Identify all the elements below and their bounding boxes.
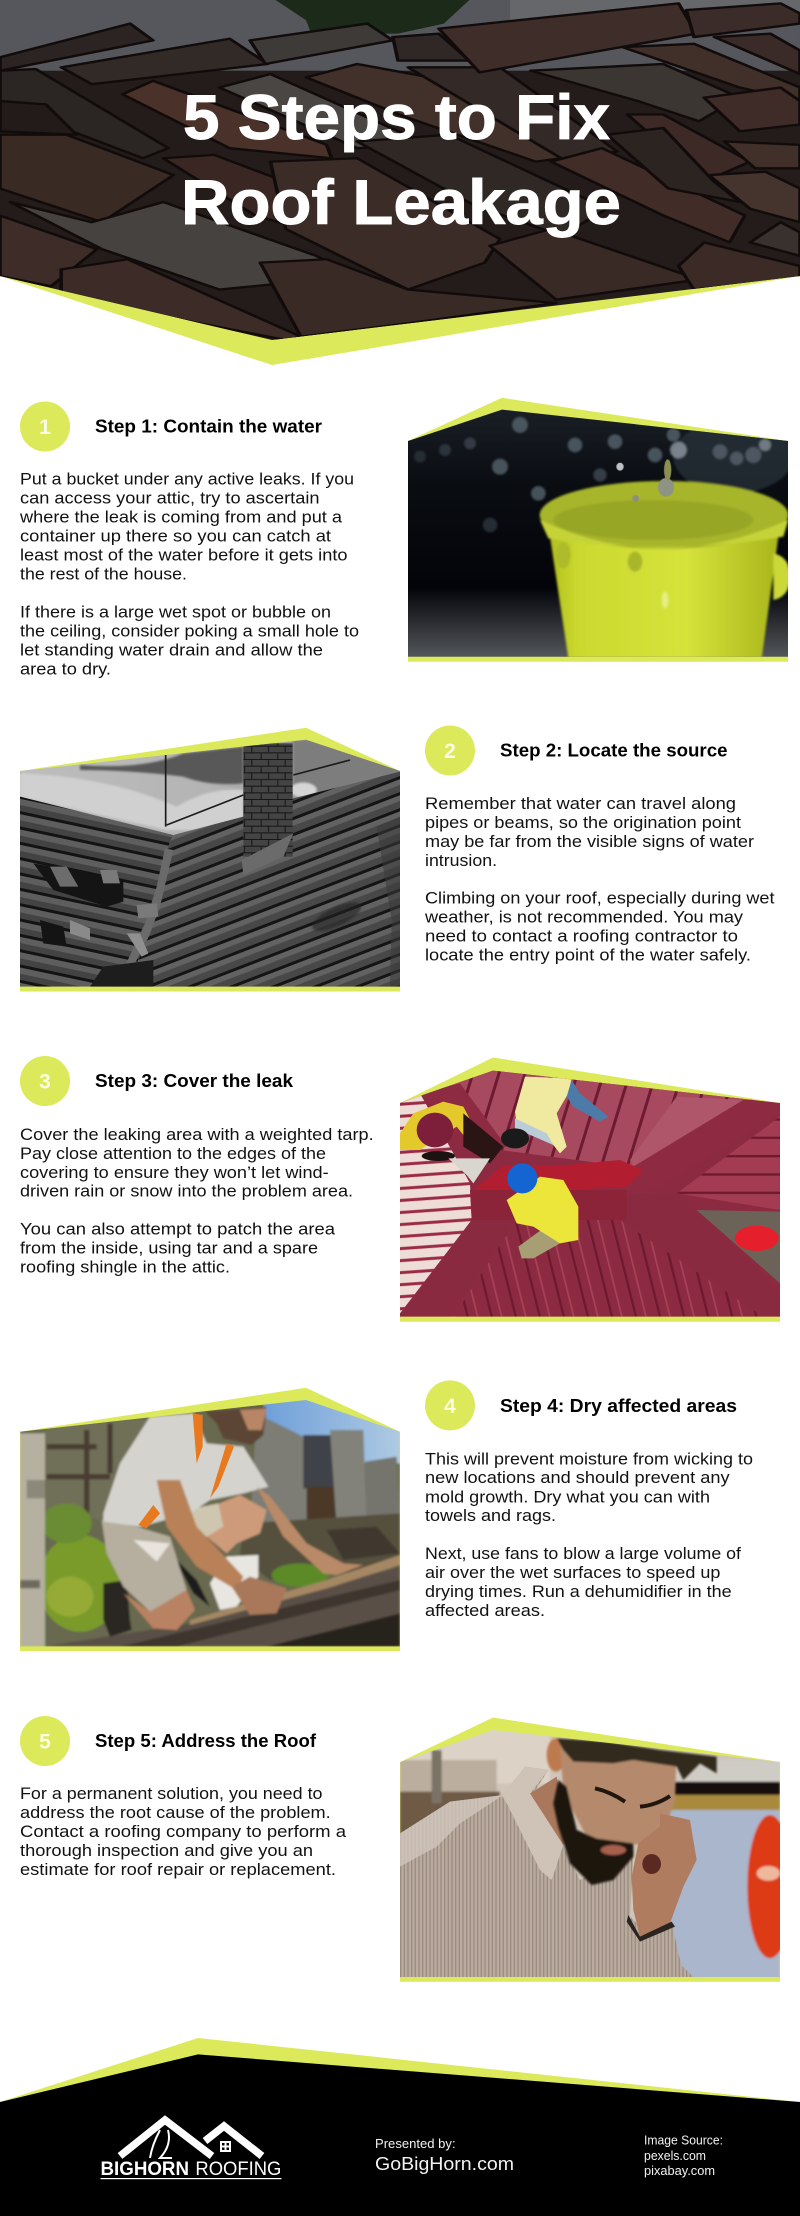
badge 3: 3 (39, 1070, 51, 1094)
heading step 2: Step 2: Locate the source (500, 741, 728, 761)
body step 5: address the root cause of the problem. (20, 1804, 331, 1822)
badge 4 (425, 1380, 475, 1430)
photo: workers on red roof (400, 1058, 780, 1322)
badge 3 (20, 1056, 70, 1106)
body step 1: where the leak is coming from and put a (19, 509, 343, 527)
body step 4: affected areas. (425, 1602, 545, 1620)
left pink panel (400, 1093, 472, 1313)
body step 4: This will prevent moisture from wicking to (425, 1450, 753, 1468)
lime roof band (0, 2038, 800, 2102)
body step 1: If there is a large wet spot or bubble on (20, 604, 331, 622)
logo: Bighorn Roofing: BIGHORN (100, 2159, 189, 2180)
presented by: GoBigHorn.com (375, 2153, 514, 2174)
eyes (595, 1788, 670, 1807)
heading step 1: Step 1: Contain the water (95, 417, 322, 437)
badge 1: 1 (39, 416, 51, 439)
heading step 3: Step 3: Cover the leak (95, 1071, 294, 1091)
body step 5 (20, 1785, 347, 1879)
body step 2: intrusion. (425, 852, 497, 870)
building (303, 1435, 337, 1488)
beard (553, 1780, 633, 1885)
body step 1 (19, 471, 359, 678)
chimney (243, 743, 293, 857)
greens (38, 1535, 122, 1632)
lower leg (123, 1590, 195, 1630)
body step 3 (20, 1126, 374, 1277)
right panel (677, 1117, 780, 1210)
body step 1: can access your attic, try to ascertain (20, 490, 320, 508)
body step 1: area to dry. (20, 660, 111, 678)
badge 2: 2 (444, 740, 456, 763)
shirt highlight (400, 1795, 503, 1867)
image source (644, 2134, 723, 2178)
body step 4: new locations and should prevent any (425, 1469, 730, 1487)
bucket (210, 1555, 258, 1610)
body step 2: weather, is not recommended. You may (424, 909, 744, 927)
hand (232, 1577, 287, 1615)
right arm (257, 1487, 363, 1575)
heading step 5: Step 5: Address the Roof (95, 1731, 317, 1751)
photo: overflowing lime bucket (407, 398, 793, 662)
title (181, 83, 621, 238)
cuff (627, 1917, 695, 1978)
grey patch (697, 1210, 780, 1283)
body step 4: mold growth. Dry what you can with (425, 1488, 710, 1506)
badge 5 (20, 1716, 70, 1766)
worker top (515, 1077, 572, 1153)
heading step 4: Step 4: Dry affected areas (500, 1396, 737, 1416)
body step 2: pipes or beams, so the origination point (425, 814, 741, 832)
badge 5: 5 (39, 1730, 51, 1754)
body step 3: Cover the leaking area with a weighted tarp. (20, 1126, 374, 1144)
stone pillar (20, 1433, 45, 1647)
title: Roof Leakage (181, 168, 621, 238)
left arm (157, 1480, 243, 1590)
hand (632, 1813, 697, 1940)
body step 5: thorough inspection and give you an (20, 1842, 313, 1860)
body step 1: let standing water drain and allow the (20, 642, 323, 660)
shirt (400, 1767, 695, 1978)
sky (0, 0, 800, 71)
roof tile photo (0, 0, 800, 350)
panel: step 2 text (424, 726, 775, 965)
icon: two roofs (120, 2120, 262, 2158)
logo: Bighorn Roofing: ROOFING (195, 2159, 281, 2180)
footer (0, 2038, 800, 2216)
ridge tiles (0, 24, 153, 71)
photo: damaged tiled roof (20, 728, 400, 992)
lower panel (453, 1220, 763, 1317)
body step 4 (425, 1450, 753, 1620)
body step 3: covering to ensure they won’t let wind- (20, 1164, 329, 1182)
face (560, 1743, 677, 1845)
body step 1: Put a bucket under any active leaks. If you (20, 471, 354, 489)
badge 4: 4 (444, 1395, 456, 1418)
body step 3: driven rain or snow into the problem area. (20, 1183, 353, 1201)
head (205, 1407, 267, 1445)
badge 2 (425, 726, 475, 776)
ear (547, 1738, 565, 1772)
shirt (103, 1413, 268, 1527)
logo: Bighorn Roofing (100, 2120, 282, 2180)
body step 5: Contact a roofing company to perform a (20, 1823, 347, 1841)
body step 5: For a permanent solution, you need to (20, 1785, 322, 1803)
straps (138, 1413, 234, 1528)
lime chevron under header (0, 276, 800, 365)
worker bottom (518, 1228, 560, 1258)
image source: pixabay.com (644, 2164, 715, 2178)
valley (126, 848, 174, 964)
upper panel (423, 1070, 753, 1166)
neck (530, 1777, 567, 1845)
deck (43, 1567, 400, 1647)
body step 3: roofing shingle in the attic. (20, 1259, 230, 1277)
body step 4: drying times. Run a dehumidifier in the (425, 1583, 732, 1601)
panel: step 5 text (20, 1716, 347, 1879)
body step 3: You can also attempt to patch the area (20, 1221, 336, 1239)
image source: Image Source: (644, 2134, 723, 2148)
image source: pexels.com (644, 2149, 706, 2163)
body step 2: need to contact a roofing contractor to (425, 928, 738, 946)
shorts (102, 1520, 187, 1612)
body step 1: the rest of the house. (20, 566, 187, 584)
hair (557, 1738, 717, 1780)
body step 2: may be far from the visible signs of water (425, 833, 755, 851)
tower (250, 1417, 308, 1523)
thigh (206, 1494, 268, 1554)
body step 3: Pay close attention to the edges of the (20, 1145, 326, 1163)
logs (240, 1513, 400, 1580)
body step 2: Remember that water can travel along (425, 795, 736, 813)
shoe (103, 1580, 132, 1637)
body step 2: Climbing on your roof, especially during wet (425, 890, 775, 908)
worker left (400, 1102, 470, 1150)
body step 2 (424, 795, 775, 965)
tree (276, 0, 469, 34)
body step 5: estimate for roof repair or replacement. (20, 1861, 336, 1879)
title: 5 Steps to Fix (183, 83, 610, 153)
body step 3: from the inside, using tar and a spare (20, 1240, 318, 1258)
scaffold background (43, 1418, 150, 1520)
body step 2: locate the entry point of the water safely. (425, 947, 751, 965)
collar (502, 1767, 563, 1880)
photo: man working on a roof (20, 1388, 400, 1651)
ridges (634, 1100, 743, 1166)
panel: step 3 text (20, 1056, 374, 1277)
panel: step 4 text (425, 1380, 753, 1620)
body step 4: towels and rags. (425, 1507, 556, 1525)
sky (263, 1397, 400, 1463)
body step 4: air over the wet surfaces to speed up (425, 1564, 720, 1582)
red tomato (747, 1815, 793, 1958)
red bag (735, 1226, 779, 1251)
broken tiles (33, 863, 158, 987)
presented by: Presented by: (375, 2137, 456, 2151)
presented by (375, 2137, 514, 2174)
black footer block (0, 2054, 800, 2216)
photo: man on the phone (400, 1718, 793, 1982)
badge 1 (20, 402, 70, 452)
body step 4: Next, use fans to blow a large volume of (425, 1545, 741, 1563)
header banner (0, 0, 800, 365)
body step 1: the ceiling, consider poking a small hole to (20, 622, 359, 640)
panel: step 1 text (19, 402, 359, 678)
body step 1: container up there so you can catch at (20, 528, 331, 546)
body step 1: least most of the water before it gets into (20, 547, 348, 565)
